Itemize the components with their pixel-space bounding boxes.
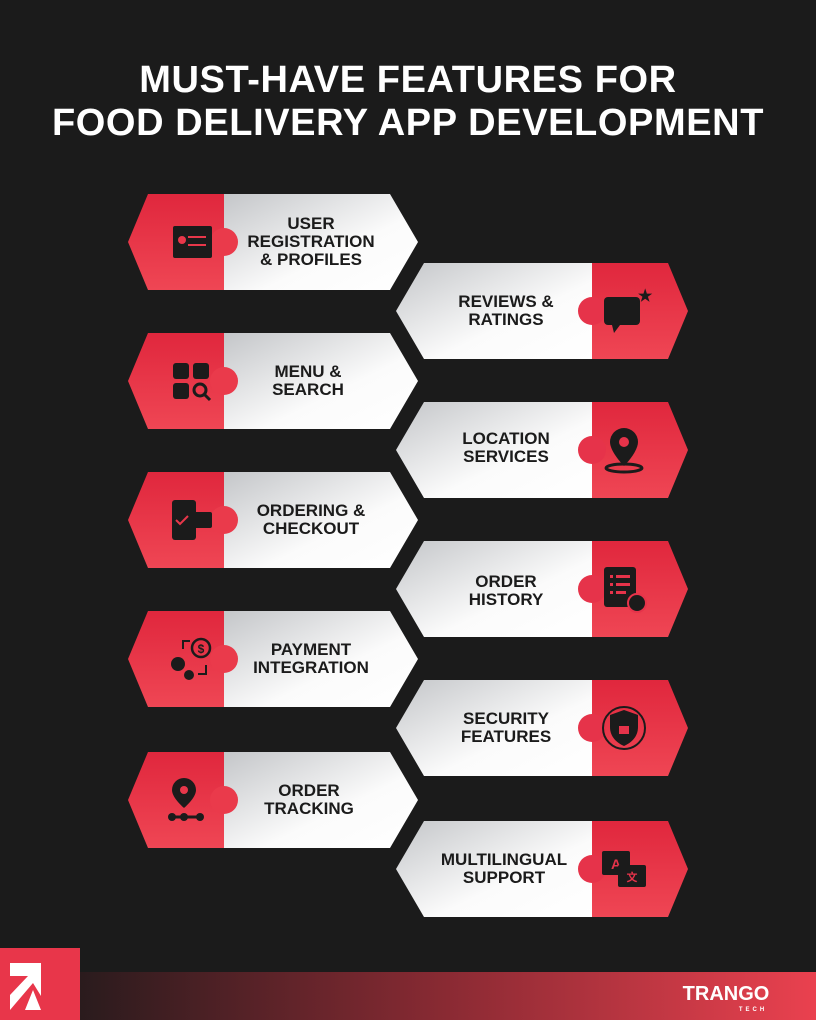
item: location services: LOCATION [462,429,550,448]
item: order history [396,541,688,637]
title: MUST-HAVE FEATURES FOR [139,59,677,101]
item: order history: HISTORY [469,590,544,609]
item: reviews & ratings: RATINGS [468,310,544,329]
title [52,59,764,144]
brand logo: TRANGO [683,983,769,1005]
item: payment integration: INTEGRATION [253,658,369,677]
item: location services [396,402,688,498]
item: order tracking: ORDER [278,781,340,800]
item: payment integration: $ [198,642,205,656]
item: payment integration: PAYMENT [271,640,352,659]
title: FOOD DELIVERY APP DEVELOPMENT [52,102,764,144]
item: multilingual support: 文 [626,869,638,885]
item: payment integration [128,611,418,707]
item: menu & search [128,333,418,429]
item: user registration: & PROFILES [260,250,362,269]
item: order history: ORDER [475,572,537,591]
item: order tracking: TRACKING [264,799,354,818]
item: security features: SECURITY [463,709,550,728]
item: security features [396,680,688,776]
item: multilingual support: A [611,856,621,872]
item: user registration: USER [287,214,335,233]
item: user registration: REGISTRATION [247,232,375,251]
item: ordering & checkout: ORDERING & [257,501,365,520]
item: reviews & ratings [396,263,688,359]
item: ordering & checkout: CHECKOUT [263,519,360,538]
brand logo: TECH [739,1007,767,1013]
item: user registration [128,194,418,290]
item: menu & search: SEARCH [272,380,344,399]
footer bar [80,972,816,1020]
item: reviews & ratings: REVIEWS & [458,292,554,311]
item: ordering & checkout [128,472,418,568]
item: multilingual support [396,821,688,917]
item: reviews & ratings: ★ [638,288,653,305]
item: menu & search: MENU & [274,362,342,381]
item: location services: SERVICES [463,447,549,466]
footer logo square [0,948,80,1020]
item: multilingual support: SUPPORT [463,868,546,887]
item: multilingual support: MULTILINGUAL [441,850,567,869]
item: security features: FEATURES [461,727,551,746]
item: order tracking [128,752,418,848]
